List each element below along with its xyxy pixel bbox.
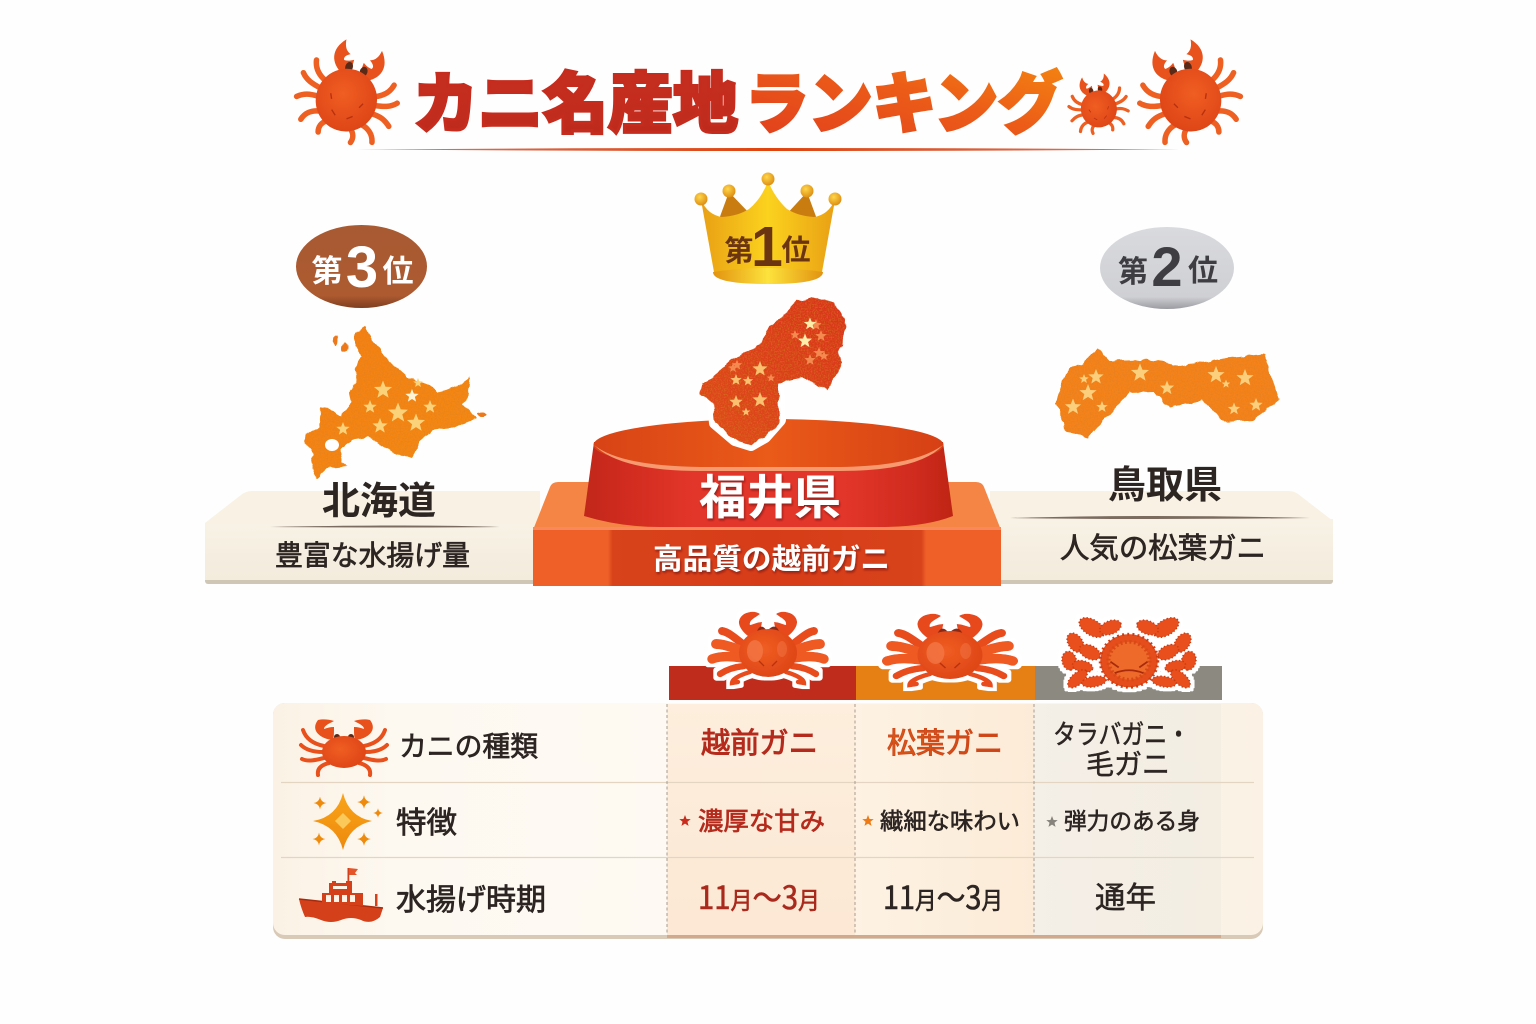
- podium: [205, 419, 1333, 586]
- row label: カニの種類: カニの種類: [399, 725, 538, 765]
- table panel: [273, 703, 1263, 939]
- icon: Matsuba crab: [887, 614, 1013, 685]
- rank badge: third: 位: [382, 246, 414, 291]
- podium: third place block: [205, 491, 540, 584]
- title part: カニ名産地: カニ名産地: [413, 51, 738, 147]
- column: Taraba tint: [1034, 704, 1221, 935]
- crown: first place: [694, 172, 842, 284]
- cell: 通年: 通年: [1095, 873, 1156, 917]
- cell: 濃厚な甘み: 濃厚な甘み: [698, 802, 825, 838]
- cell: タラバガニ・毛ガニ: 毛ガニ: [1086, 743, 1170, 783]
- title text: [413, 51, 1062, 147]
- rank badge: second: 位: [1188, 246, 1218, 290]
- cell: 繊細な味わい: 繊細な味わい: [880, 802, 1020, 836]
- label: 豊富な水揚げ量: 豊富な水揚げ量: [275, 534, 470, 574]
- cell: 弾力のある身: 弾力のある身: [1064, 802, 1200, 836]
- map: Hokkaido: [304, 327, 486, 478]
- column: Matsuba tint: [855, 704, 1034, 935]
- row icon: crab: [301, 719, 387, 775]
- rank badge: third: [296, 225, 427, 308]
- label: 福井県: 福井県: [699, 459, 841, 528]
- cell: 越前ガニ: 越前ガニ: [701, 720, 818, 762]
- rank badge: third: 第: [312, 246, 342, 291]
- rank badge: second: 第: [1118, 247, 1148, 291]
- title banner: [287, 30, 1250, 153]
- cell: 11月〜3月 Matsuba: 11月～3月: [883, 873, 1003, 919]
- column header band: Matsuba: [856, 666, 1035, 700]
- cell: 松葉ガニ: 松葉ガニ: [887, 720, 1003, 762]
- map: Tottori: [1056, 348, 1279, 437]
- rank badge: second: [1100, 227, 1234, 309]
- icon: Echizen crab: [712, 612, 824, 683]
- row icon: ship: [299, 868, 383, 922]
- podium: second place block: [990, 491, 1333, 584]
- icon: Taraba crab: [1060, 614, 1198, 691]
- cell: 11月〜3月 Echizen: 11月～3月: [698, 873, 820, 919]
- podium: first place drum: [584, 419, 953, 527]
- column header band: Echizen: [669, 666, 856, 700]
- podium: first place base: [533, 482, 1001, 586]
- rank badge: second: 2: [1151, 235, 1183, 298]
- cell: タラバガニ・毛ガニ: タラバガニ・: [1053, 713, 1190, 752]
- column: Echizen tint: [667, 704, 855, 935]
- column header band: Taraba: [1035, 666, 1222, 700]
- crown: first place: 位: [781, 227, 811, 269]
- crown: first place: 1: [751, 215, 783, 279]
- row label: 特徴: 特徴: [396, 798, 457, 842]
- row label: 水揚げ時期: 水揚げ時期: [396, 875, 546, 919]
- label: 高品質の越前ガニ: 高品質の越前ガニ: [653, 536, 890, 578]
- title part: ランキング: ランキング: [745, 51, 1062, 147]
- row icon: sparkle: [313, 793, 383, 850]
- icon: title crab right: [1126, 30, 1250, 153]
- label: 人気の松葉ガニ: 人気の松葉ガニ: [1060, 525, 1266, 567]
- cell: タラバガニ・毛ガニ: [1053, 713, 1190, 783]
- label: 鳥取県: 鳥取県: [1108, 454, 1222, 509]
- icon: small title crab: [1064, 70, 1131, 137]
- crown: first place: 第: [724, 228, 754, 270]
- comparison table: [273, 612, 1263, 939]
- title underline: [356, 148, 1180, 151]
- label: 北海道: 北海道: [322, 470, 436, 525]
- icon: title crab left: [287, 30, 411, 153]
- map: Fukui: [701, 297, 845, 445]
- rank badge: third: 3: [346, 235, 378, 300]
